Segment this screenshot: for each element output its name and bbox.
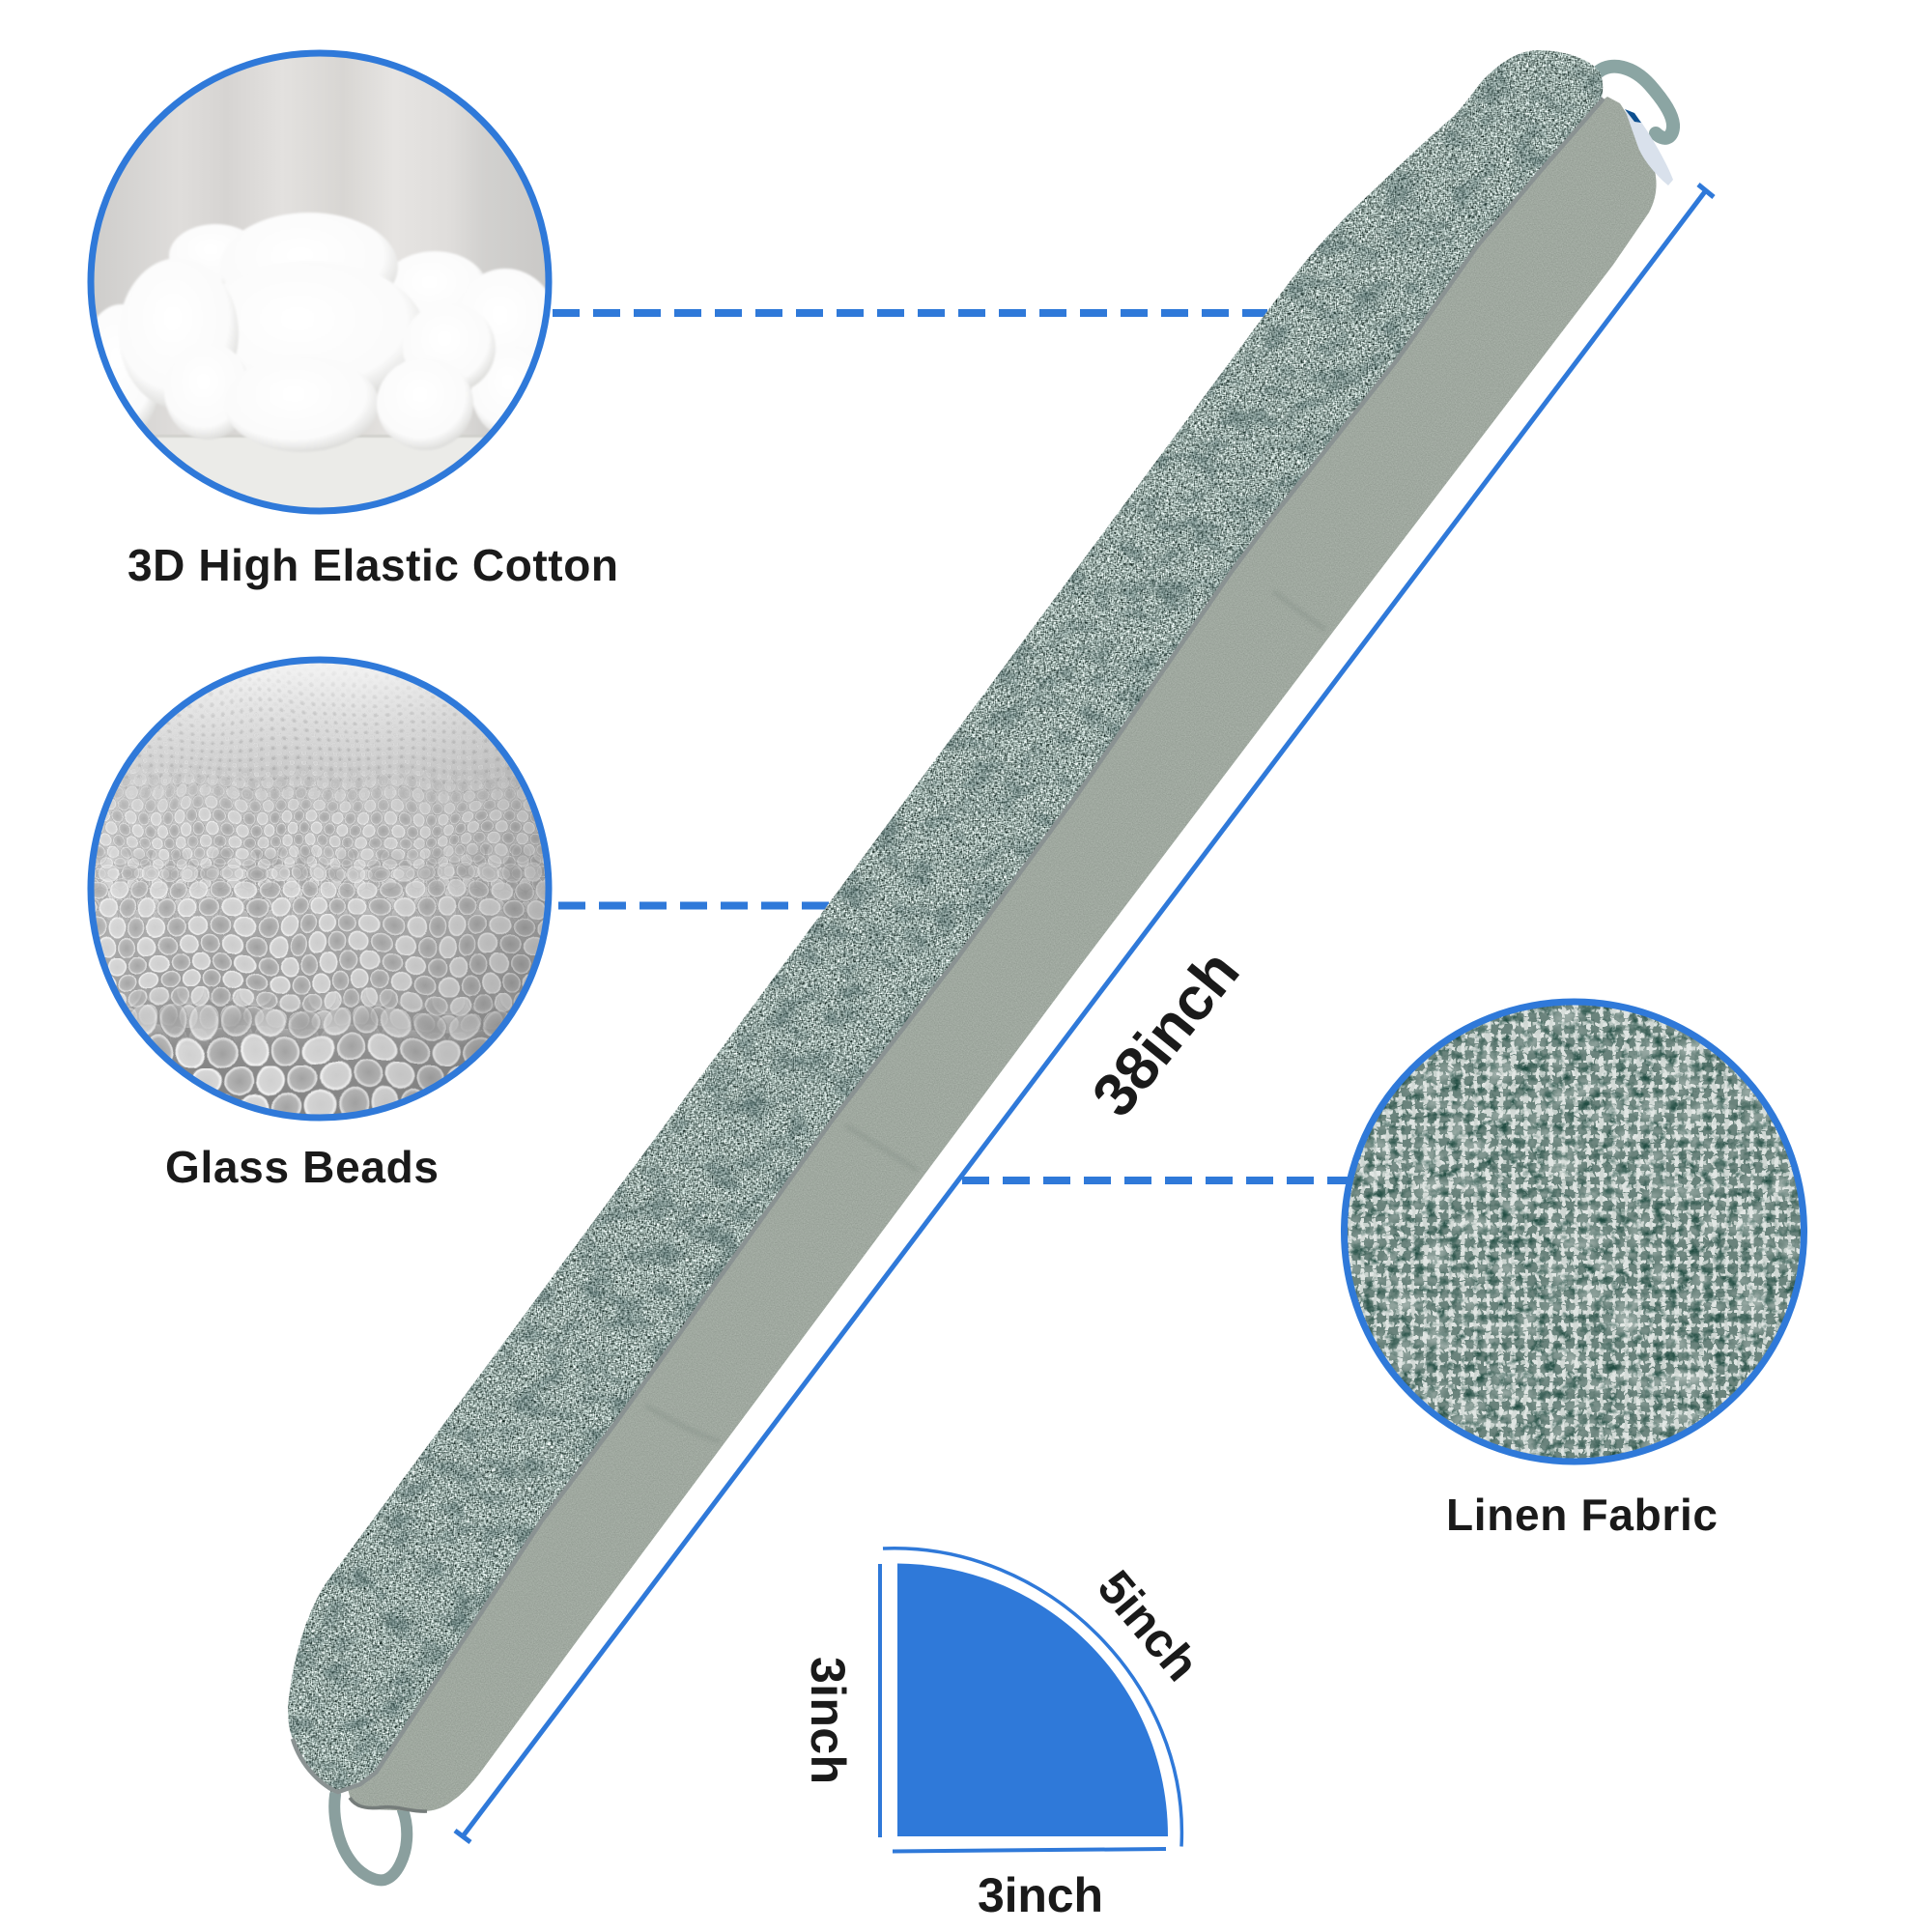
panel: cotton material circle	[80, 48, 558, 518]
hang tag	[1625, 109, 1673, 185]
connector: glass beads dashed line	[558, 902, 832, 910]
fabric creases	[645, 591, 1325, 1441]
piping seam	[293, 99, 1604, 1792]
label: Linen Fabric: Linen Fabric	[1446, 1490, 1718, 1540]
label: 3inch left side: 3inch	[801, 1657, 855, 1784]
bottom trim	[350, 1798, 427, 1811]
hang tag blue mark	[1625, 109, 1641, 123]
panel: door draft stopper product	[288, 50, 1673, 1880]
blue quarter sector	[897, 1563, 1168, 1836]
connector: linen dashed line	[962, 1177, 1348, 1184]
panel: linen fabric material circle	[1341, 999, 1807, 1464]
arc measure line	[883, 1548, 1181, 1847]
label: 3D High Elastic Cotton: 3D High Elastic Cotton	[128, 540, 618, 590]
label: Glass Beads: Glass Beads	[165, 1142, 439, 1192]
bottom rope loop	[334, 1795, 407, 1880]
top rope loop	[1599, 67, 1673, 138]
left measure line	[878, 1564, 882, 1837]
label: 38inch: 38inch	[1079, 938, 1252, 1129]
side fabric panel	[348, 97, 1657, 1811]
panel: glass beads material circle	[87, 657, 553, 1121]
label: 5inch arc: 5inch	[1088, 1560, 1209, 1691]
label: 3inch bottom: 3inch	[978, 1868, 1103, 1922]
diagram: quarter-circle cross section	[880, 1548, 1181, 1851]
dimension line: 38inch length	[455, 185, 1714, 1842]
connector: cotton dashed line	[553, 309, 1267, 317]
linen top panel	[288, 50, 1603, 1793]
bottom measure line	[893, 1849, 1166, 1851]
